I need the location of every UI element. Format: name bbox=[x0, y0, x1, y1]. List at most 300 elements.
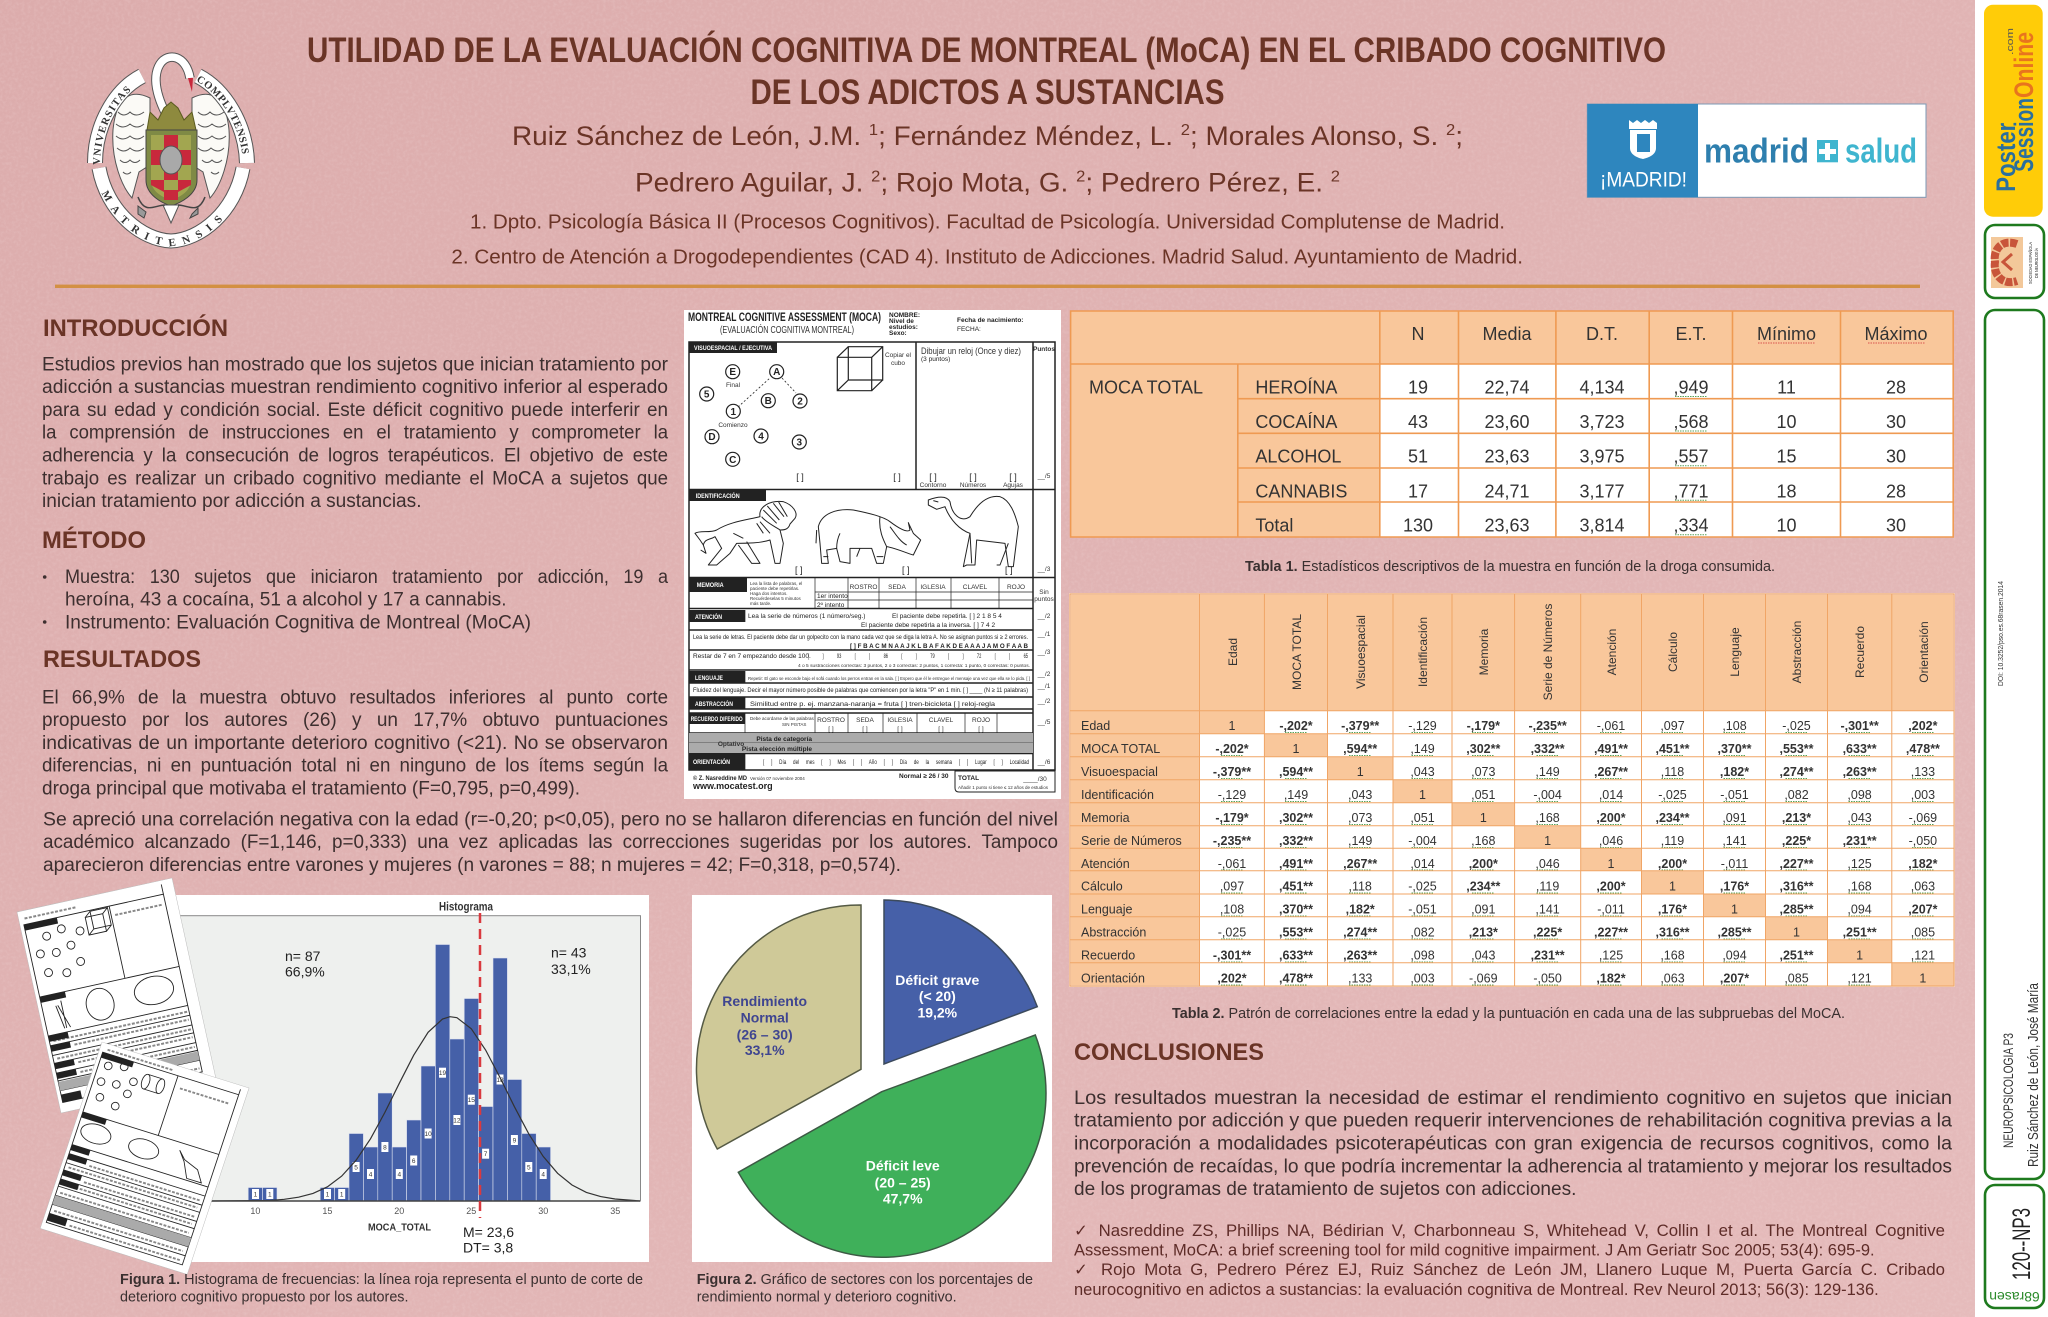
row: total bbox=[1255, 516, 1906, 536]
sidebar: neurology society logo: DE NEUROLOGÍA bbox=[2033, 247, 2039, 278]
form small text: ROSTRO bbox=[817, 717, 845, 724]
rotated column headers: Cálculo bbox=[1666, 632, 1680, 672]
label: déficit grave: 19,2% bbox=[917, 1004, 958, 1020]
text block: conclusiones: de los programas de tratamiento de sujetos con adicciones. bbox=[1074, 1179, 1576, 1200]
form small text: CLAVEL bbox=[929, 717, 954, 724]
row: Identificación: ,082 bbox=[1784, 788, 1809, 802]
row: Visuoespacial: 1 bbox=[1357, 765, 1364, 779]
row: Cálculo: ,200* bbox=[1596, 880, 1626, 894]
caption: figure 2: Figura 2. Gráfico de sectores con los porcentajes de bbox=[697, 1272, 1033, 1288]
form small text: www.mocatest.org bbox=[692, 781, 773, 791]
form small text bbox=[692, 346, 1055, 792]
panel: MoCA test form bbox=[684, 310, 1061, 799]
annotation: mean and SD: M= 23,6 bbox=[463, 1224, 514, 1240]
label: déficit leve bbox=[866, 1158, 940, 1206]
logo: Madrid Salud: salud bbox=[1845, 132, 1917, 170]
form small text: Contorno bbox=[920, 482, 947, 489]
label: rendimiento normal: Normal bbox=[741, 1010, 789, 1026]
row: Identificación bbox=[1081, 788, 1935, 802]
references bbox=[1074, 1221, 1945, 1299]
heading: resultados: RESULTADOS bbox=[43, 646, 201, 673]
row: Orientación: ,003 bbox=[1410, 972, 1435, 986]
form small text: Añadir 1 punto si tiene ≤ 12 años de estudios bbox=[958, 785, 1049, 790]
form small text: Haga dos intentos. bbox=[750, 591, 788, 596]
row: Edad: ,108 bbox=[1722, 719, 1747, 733]
rotated column headers: Lenguaje bbox=[1728, 627, 1742, 677]
row: Edad: -,301** bbox=[1840, 719, 1879, 733]
form small text: Pista elección múltiple bbox=[742, 746, 812, 753]
row: alcohol: ALCOHOL bbox=[1255, 447, 1341, 467]
form small text: Agujas bbox=[1003, 482, 1024, 489]
text block: conclusiones: Los resultados muestran la necesidad de estimar el rendimiento cognitivo en sujetos que inician bbox=[1074, 1088, 1952, 1109]
form small text: __/3 bbox=[1037, 566, 1051, 573]
row: Serie de Números bbox=[1081, 834, 1937, 848]
row: Serie de Números: -,235** bbox=[1213, 834, 1251, 848]
rotated column headers bbox=[1226, 604, 1931, 700]
row: Edad: 1 bbox=[1229, 719, 1236, 733]
authors: ; Pedrero Pérez, E. bbox=[1085, 168, 1331, 198]
row: Memoria: ,043 bbox=[1847, 811, 1872, 825]
row: heroína: ,949 bbox=[1673, 377, 1709, 397]
annotation: below cut-off: n= 87 bbox=[285, 948, 321, 964]
histogram title: Histograma bbox=[439, 902, 494, 914]
bar count labels: 12 bbox=[453, 1118, 461, 1124]
row: Orientación: Orientación bbox=[1081, 972, 1145, 986]
form heading: Fecha de nacimiento: bbox=[957, 317, 1023, 324]
trail-making circles: 5 bbox=[704, 390, 710, 400]
bar count labels: 1 bbox=[326, 1192, 330, 1198]
x axis labels bbox=[250, 1206, 620, 1216]
row: MOCA TOTAL: ,594** bbox=[1343, 742, 1377, 756]
logo: Universidad Complutense crest: MATRITENSIS bbox=[102, 190, 222, 246]
row: Edad: -,129 bbox=[1408, 719, 1437, 733]
row: Atención: ,014 bbox=[1410, 857, 1435, 871]
row: Serie de Números: ,149 bbox=[1348, 834, 1372, 848]
form heading: Sexo: bbox=[889, 330, 907, 337]
row: Recuerdo: ,121 bbox=[1911, 948, 1935, 962]
row: Atención: ,227** bbox=[1779, 857, 1814, 871]
form heading bbox=[688, 312, 1023, 337]
trail-making circles bbox=[700, 365, 807, 466]
row: MOCA TOTAL: ,633** bbox=[1843, 742, 1877, 756]
row: alcohol: 51 bbox=[1408, 447, 1428, 467]
row: Identificación: ,051 bbox=[1471, 788, 1496, 802]
references: neurocognitivo en adictos a sustancias: la evaluación cognitiva de Montreal. Rev Neurol 2013; 56(3): 129-136. bbox=[1074, 1281, 1879, 1299]
row: Atención: ,182* bbox=[1908, 857, 1938, 871]
bar count labels: 1 bbox=[254, 1192, 258, 1198]
sidebar: neurology society logo bbox=[1985, 225, 2044, 298]
row: Visuoespacial: Visuoespacial bbox=[1081, 765, 1158, 779]
row: MOCA TOTAL: 1 bbox=[1293, 742, 1300, 756]
slice: déficit grave bbox=[884, 900, 1037, 1064]
row: Recuerdo: ,633** bbox=[1279, 948, 1313, 962]
sidebar: PosterSessionOnline logo: Session bbox=[2009, 98, 2039, 172]
form small text: SEDA bbox=[856, 717, 875, 724]
form small text: __/1 bbox=[1037, 631, 1051, 638]
row: Atención: -,011 bbox=[1721, 857, 1748, 871]
text block: resultados bbox=[42, 687, 668, 800]
text block: introducción: la comprensión de instrucciones en el tratamiento y comprometer la bbox=[42, 423, 668, 444]
x axis labels: 25 bbox=[466, 1206, 476, 1216]
authors bbox=[512, 121, 1463, 198]
rotated column headers: Memoria bbox=[1477, 628, 1491, 675]
section tabs: MEMORIA bbox=[697, 582, 724, 589]
section tabs: VISUOESPACIAL / EJECUTIVA bbox=[694, 345, 772, 352]
table 1 header bbox=[1412, 324, 1928, 344]
form small text: CLAVEL bbox=[963, 584, 988, 591]
sidebar: poster info box bbox=[1985, 310, 2044, 1179]
form small text: Recuérdeselas 5 minutos bbox=[750, 596, 802, 601]
row: total: 3,814 bbox=[1579, 516, 1625, 536]
form small text: [ ] 93 [ ] 86 [ ] 79 [ ] 72 [ ] 65 bbox=[808, 653, 1028, 660]
row: Lenguaje: ,108 bbox=[1220, 902, 1244, 916]
row: Lenguaje: 1 bbox=[1731, 902, 1738, 916]
table 2: correlations bbox=[1070, 594, 1954, 986]
table 1 header: Máximo bbox=[1864, 324, 1928, 344]
row: Lenguaje: ,176* bbox=[1658, 902, 1687, 916]
form small text: Fluidez del lenguaje. Decir el mayor número posible de palabras que comiencen por la letra "P" en 1 min. [ ] ____ (N ≥ 11 palabras) bbox=[693, 687, 1028, 694]
row: MOCA TOTAL: ,553** bbox=[1779, 742, 1814, 756]
row: Orientación: ,133 bbox=[1348, 972, 1372, 986]
row: Recuerdo: ,125 bbox=[1599, 948, 1623, 962]
row: Identificación: Identificación bbox=[1081, 788, 1154, 802]
row: alcohol: ,557 bbox=[1673, 447, 1709, 467]
form small text: [ ] bbox=[796, 472, 804, 482]
text block: correlaciones: aparecieron diferencias entre varones y mujeres (n varones = 88; n mujeres = 42; F=0,318, p=0,574). bbox=[43, 855, 901, 876]
text block: resultados: droga principal que motivaba el tratamiento (F=0,795, p=0,499). bbox=[42, 779, 580, 800]
text block: conclusiones: tratamiento por adicción y que pueden requerir intervenciones de rehabilitación cognitiva previas a la bbox=[1074, 1111, 1952, 1132]
form small text: 2º intento bbox=[817, 602, 845, 609]
affiliations: 2. Centro de Atención a Drogodependientes (CAD 4). Instituto de Adicciones. Madrid Salud. Ayuntamiento de Madrid. bbox=[451, 246, 1523, 268]
form small text: __/6 bbox=[1037, 759, 1051, 766]
row: cannabis: 17 bbox=[1408, 481, 1428, 501]
logo: Universidad Complutense crest bbox=[87, 52, 255, 248]
animal drawings: lion, rhino, camel bbox=[695, 496, 1018, 567]
row: Serie de Números: 1 bbox=[1544, 834, 1551, 848]
form small text: El paciente debe repetirla a la inversa. [ ] 7 4 2 bbox=[861, 622, 995, 629]
cube bbox=[837, 347, 883, 391]
heading: método: MÉTODO bbox=[42, 526, 146, 554]
form small text: Sin bbox=[1039, 589, 1049, 596]
row: Visuoespacial: ,594** bbox=[1279, 765, 1313, 779]
trail-making circles: B bbox=[765, 396, 772, 407]
panel: histogram figure bbox=[170, 895, 649, 1262]
table 1: descriptive statistics bbox=[1071, 311, 1953, 537]
sidebar: poster info box: DOI: 10.3252/pso.es.68rasen.2014 bbox=[1996, 581, 2005, 686]
row: Atención: -,061 bbox=[1218, 857, 1246, 871]
row: Serie de Números: ,119 bbox=[1661, 834, 1684, 848]
row: Cálculo: ,063 bbox=[1911, 880, 1935, 894]
row: Identificación: ,149 bbox=[1284, 788, 1308, 802]
bar count labels bbox=[252, 1068, 547, 1199]
decoration: rotated test form back bbox=[17, 878, 216, 1113]
text block: correlaciones bbox=[43, 809, 1058, 876]
form small text: __/2 bbox=[1037, 698, 1051, 705]
form small text: [ ] bbox=[795, 565, 803, 575]
row: Identificación: ,014 bbox=[1599, 788, 1623, 802]
row: MOCA TOTAL: ,332** bbox=[1531, 742, 1565, 756]
row: Lenguaje: -,011 bbox=[1597, 902, 1625, 916]
row: Serie de Números: ,141 bbox=[1722, 834, 1747, 848]
form small text: __/2 bbox=[1037, 613, 1051, 620]
form small text: Repetir: El gato se esconde bajo el sofá cuando los perros entran en la sala. [ ] Espero que él le entregue el mensaje una vez que ella se lo pida. [ ] bbox=[748, 676, 1030, 681]
form grid bbox=[689, 342, 1055, 770]
row: total: 10 bbox=[1776, 516, 1797, 536]
bar count labels: 4 bbox=[541, 1172, 545, 1178]
row: Atención: ,200* bbox=[1658, 857, 1687, 871]
form small text: Restar de 7 en 7 empezando desde 100. bbox=[693, 653, 811, 660]
form small text: Pista de categoría bbox=[756, 736, 812, 743]
references: Assessment, MoCA: a brief screening tool for mild cognitive impairment. J Am Geriatr Soc 2005; 53(4): 695-9. bbox=[1074, 1242, 1875, 1260]
row: Orientación: ,121 bbox=[1847, 972, 1872, 986]
panel: introducción bbox=[42, 314, 669, 512]
row: Recuerdo: ,168 bbox=[1660, 948, 1685, 962]
text block: correlaciones: Se apreció una correlación negativa con la edad (r=-0,20; p<0,05), pero no se hallaron diferencias en función del nivel bbox=[43, 809, 1058, 830]
row: total: ,334 bbox=[1673, 516, 1709, 536]
histogram bars bbox=[248, 944, 551, 1201]
row: Visuoespacial: ,149 bbox=[1535, 765, 1560, 779]
form small text: Números bbox=[960, 482, 987, 489]
table 1 header: D.T. bbox=[1586, 324, 1618, 344]
row: Visuoespacial: ,043 bbox=[1410, 765, 1435, 779]
sidebar: poster code box: 120--NP3 bbox=[2008, 1208, 2036, 1280]
bar count labels: 7 bbox=[484, 1151, 488, 1158]
row: Identificación: ,098 bbox=[1847, 788, 1872, 802]
rotated column headers: Recuerdo bbox=[1853, 626, 1867, 678]
row: Lenguaje: ,094 bbox=[1847, 902, 1872, 916]
row: Atención: Atención bbox=[1081, 857, 1130, 871]
row: Identificación: -,004 bbox=[1533, 788, 1562, 802]
row: Recuerdo: ,263** bbox=[1343, 948, 1377, 962]
caption: figure 1: Figura 1. Histograma de frecuencias: la línea roja representa el punto de corte de bbox=[120, 1272, 643, 1288]
form small text: [ ] bbox=[893, 472, 901, 482]
references: Nasreddine ZS, Phillips NA, Bédirian V, Charbonneau S, Whitehead V, Collin I et al. The Montreal Cognitive bbox=[1099, 1222, 1945, 1240]
row: Orientación: ,182* bbox=[1596, 972, 1626, 986]
table 1 header: Mínimo bbox=[1757, 324, 1816, 344]
row: Abstracción: ,274** bbox=[1343, 926, 1377, 940]
form small text: ROSTRO bbox=[850, 584, 877, 591]
red cut-off line bbox=[479, 913, 481, 1218]
form small text: [ ] F B A C M N A A J K L B A F A K D E A A A J A M O F A A B bbox=[850, 643, 1028, 650]
row: alcohol: 23,63 bbox=[1484, 447, 1530, 467]
row: Edad: -,179* bbox=[1467, 719, 1500, 733]
row: MOCA TOTAL: MOCA TOTAL bbox=[1081, 742, 1160, 756]
x axis labels: 10 bbox=[250, 1206, 260, 1216]
row: Orientación: ,063 bbox=[1660, 972, 1685, 986]
section tabs: ATENCIÓN bbox=[695, 612, 722, 621]
row: Orientación: -,069 bbox=[1469, 972, 1498, 986]
table 1 row label: MOCA TOTAL bbox=[1089, 377, 1203, 397]
row: Cálculo: Cálculo bbox=[1081, 880, 1123, 894]
row: cannabis: CANNABIS bbox=[1255, 481, 1347, 501]
form small text: Final bbox=[726, 382, 741, 389]
text block: conclusiones bbox=[1074, 1088, 1952, 1200]
text block: resultados: diferencias, ni en puntuación total ni en ninguno de los ítems según la bbox=[42, 756, 668, 777]
form small text: __/2 bbox=[1037, 671, 1051, 678]
form small text: __/3 bbox=[1037, 649, 1051, 656]
bar count labels: 9 bbox=[513, 1138, 517, 1144]
sidebar: PosterSessionOnline logo: Online bbox=[2009, 32, 2039, 98]
row: MOCA TOTAL: ,302** bbox=[1466, 742, 1500, 756]
table 1 header: Media bbox=[1482, 324, 1532, 344]
row: cocaína: ,568 bbox=[1673, 412, 1709, 432]
row: alcohol bbox=[1255, 447, 1906, 467]
sidebar: poster code box: 68rasen bbox=[1989, 1289, 2040, 1305]
annotation: above cut-off: 33,1% bbox=[551, 961, 591, 977]
row: Identificación: 1 bbox=[1419, 788, 1426, 802]
bar count labels: 1 bbox=[340, 1192, 344, 1198]
row: Abstracción: Abstracción bbox=[1081, 926, 1146, 940]
text block: introducción: Estudios previos han mostrado que los sujetos que inician tratamiento por bbox=[42, 354, 669, 375]
rotated column headers: Serie de Números bbox=[1541, 604, 1555, 700]
row: Lenguaje: ,207* bbox=[1908, 902, 1938, 916]
row: Visuoespacial: ,133 bbox=[1911, 765, 1935, 779]
form small text: SEDA bbox=[888, 584, 907, 591]
row: Lenguaje: -,051 bbox=[1408, 902, 1437, 916]
row: Memoria bbox=[1081, 811, 1937, 825]
authors: ; bbox=[1455, 121, 1463, 151]
row: Atención bbox=[1081, 857, 1938, 871]
row: Recuerdo: 1 bbox=[1856, 948, 1863, 962]
row: total: 23,63 bbox=[1484, 516, 1530, 536]
row: Atención: 1 bbox=[1608, 857, 1615, 871]
row: MOCA TOTAL: ,370** bbox=[1717, 742, 1752, 756]
row: Memoria: ,200* bbox=[1596, 811, 1626, 825]
form small text: [ ] bbox=[969, 472, 977, 482]
sidebar: poster info box: NEUROPSICOLOGIA P3 bbox=[2000, 1033, 2016, 1148]
panel: pie chart bbox=[692, 895, 1052, 1262]
row: cannabis: 28 bbox=[1886, 481, 1906, 501]
form heading: estudios: bbox=[889, 324, 918, 331]
form small text: Dibujar un reloj (Once y diez) bbox=[921, 346, 1021, 356]
references: ✓ bbox=[1074, 1221, 1088, 1240]
form small text: __/5 bbox=[1037, 719, 1051, 726]
row: MOCA TOTAL bbox=[1081, 742, 1940, 756]
row: Memoria: ,213* bbox=[1782, 811, 1811, 825]
decoration: rotated test form front bbox=[40, 1042, 249, 1274]
row: MOCA TOTAL: -,202* bbox=[1215, 742, 1249, 756]
affiliations: 1. Dpto. Psicología Básica II (Procesos Cognitivos). Facultad de Psicología. Universidad Complutense de Madrid. bbox=[470, 212, 1505, 234]
row: Orientación: ,085 bbox=[1784, 972, 1809, 986]
form small text: [ ] bbox=[1005, 565, 1013, 575]
row: Lenguaje bbox=[1081, 902, 1938, 916]
sidebar: PosterSessionOnline logo: .com bbox=[2005, 28, 2015, 55]
rotated column headers: Visuoespacial bbox=[1354, 615, 1368, 689]
bar count labels: 15 bbox=[468, 1097, 475, 1104]
label: déficit leve: Déficit leve bbox=[866, 1158, 940, 1174]
title: DE LOS ADICTOS A SUSTANCIAS bbox=[750, 73, 1224, 112]
row: heroína: 4,134 bbox=[1579, 377, 1625, 397]
form small text: Similitud entre p. ej. manzana-naranja = fruta [ ] tren-bicicleta [ ] reloj-regla bbox=[750, 701, 995, 708]
row: total: 30 bbox=[1886, 516, 1906, 536]
form small text: Versión 07 noviembre 2004 bbox=[750, 776, 805, 781]
trail-making circles: E bbox=[729, 367, 736, 378]
caption: table 1: Tabla 1. Estadísticos descriptivos de la muestra en función de la droga consumida. bbox=[1245, 559, 1775, 575]
row: Visuoespacial: ,118 bbox=[1661, 765, 1684, 779]
text block: correlaciones: académico alcanzado (F=1,146, p=0,333) una vez aplicadas las correcciones sugeridas por los autores. Tampoco bbox=[43, 832, 1058, 853]
form small text: Debe acordarse de las palabras bbox=[750, 716, 815, 721]
x axis labels: 20 bbox=[394, 1206, 404, 1216]
row: Recuerdo bbox=[1081, 948, 1935, 962]
logo: Universidad Complutense crest: VNIVERSITAS bbox=[93, 86, 130, 165]
row: Orientación bbox=[1081, 972, 1926, 986]
bar count labels: 8 bbox=[383, 1144, 387, 1152]
section tabs: RECUERDO DIFERIDO bbox=[691, 716, 743, 723]
form small text: [ ] bbox=[862, 726, 868, 733]
form small text: Comienzo bbox=[718, 422, 748, 429]
row: heroína: 19 bbox=[1408, 377, 1428, 397]
text block: resultados: El 66,9% de la muestra obtuvo resultados inferiores al punto corte bbox=[42, 687, 668, 708]
row: Memoria: ,234** bbox=[1655, 811, 1690, 825]
row: Lenguaje: ,141 bbox=[1535, 902, 1560, 916]
row: Identificación: -,025 bbox=[1658, 788, 1687, 802]
form small text: IGLESIA bbox=[887, 717, 913, 724]
row: Cálculo: ,234** bbox=[1466, 880, 1500, 894]
caption: figure 2: rendimiento normal y deterioro cognitivo. bbox=[697, 1290, 957, 1306]
row: Identificación: ,003 bbox=[1911, 788, 1935, 802]
row: Edad: ,202* bbox=[1908, 719, 1938, 733]
panel: resultados bbox=[42, 646, 1058, 876]
form small text: más tarde. bbox=[750, 601, 771, 606]
row: cocaína: 43 bbox=[1408, 412, 1428, 432]
label: rendimiento normal bbox=[722, 993, 807, 1058]
bar count labels: 4 bbox=[397, 1172, 401, 1178]
row: Orientación: ,207* bbox=[1720, 972, 1749, 986]
row: heroína: HEROÍNA bbox=[1255, 377, 1337, 397]
rotated column headers: Abstracción bbox=[1790, 621, 1804, 683]
row: cannabis: 3,177 bbox=[1579, 481, 1625, 501]
normal curve bbox=[208, 1017, 640, 1201]
trail-making circles: A bbox=[773, 367, 780, 378]
bar count labels: 5 bbox=[354, 1164, 358, 1172]
rotated column headers: Atención bbox=[1605, 629, 1619, 675]
row: Identificación: -,051 bbox=[1720, 788, 1749, 802]
bar count labels: 4 bbox=[369, 1172, 373, 1178]
form small text: [ ] bbox=[902, 565, 910, 575]
form small text: Lea la serie de letras. El paciente debe dar un golpecito con la mano cada vez que se diga la letra A. No se asignan puntos si ≥ 2 errores. bbox=[693, 634, 1028, 641]
row: cocaína: 23,60 bbox=[1484, 412, 1530, 432]
row: Orientación: 1 bbox=[1919, 972, 1926, 986]
row: Edad: -,235** bbox=[1528, 719, 1567, 733]
authors: 2 bbox=[871, 169, 880, 186]
text block: método: heroína, 43 a cocaína, 51 a alcohol y 17 a cannabis. bbox=[65, 590, 507, 611]
authors: ; Rojo Mota, G. bbox=[880, 168, 1076, 198]
logo: Madrid Salud: ¡MADRID! bbox=[1600, 169, 1687, 192]
row: Atención: ,125 bbox=[1847, 857, 1872, 871]
row: Orientación: -,050 bbox=[1533, 972, 1562, 986]
affiliations bbox=[451, 212, 1523, 268]
x axis labels: 15 bbox=[322, 1206, 332, 1216]
row: Serie de Números: -,050 bbox=[1909, 834, 1937, 848]
row: Identificación: ,043 bbox=[1348, 788, 1372, 802]
trail-making circles: 3 bbox=[797, 438, 803, 448]
row: Abstracción: ,082 bbox=[1410, 926, 1435, 940]
form small text: © Z. Nasreddine MD bbox=[693, 774, 747, 782]
row: Visuoespacial: -,379** bbox=[1213, 765, 1251, 779]
section tabs: LENGUAJE bbox=[695, 675, 724, 682]
row: Edad: ,097 bbox=[1660, 719, 1685, 733]
label: rendimiento normal: (26 – 30) bbox=[737, 1026, 793, 1042]
form small text: [ ] bbox=[938, 726, 944, 733]
form small text: Puntos bbox=[1033, 346, 1055, 353]
row: Cálculo: -,025 bbox=[1408, 880, 1437, 894]
row: alcohol: 3,975 bbox=[1579, 447, 1625, 467]
authors: Pedrero Aguilar, J. bbox=[635, 168, 856, 198]
row: Recuerdo: Recuerdo bbox=[1081, 948, 1135, 962]
section tabs: IDENTIFICACIÓN bbox=[696, 491, 740, 500]
trail-making circles: C bbox=[729, 455, 736, 466]
annotation: mean and SD: DT= 3,8 bbox=[463, 1240, 513, 1256]
